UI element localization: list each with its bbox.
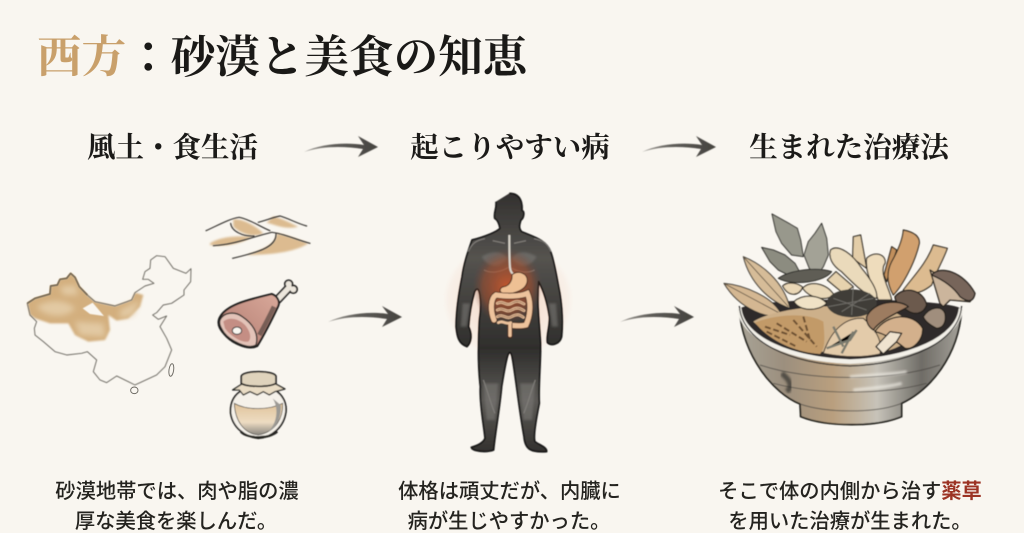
arrow: header two to three bbox=[642, 136, 716, 157]
text: robust body weak organs: 病が生じやすかった。 bbox=[408, 510, 610, 533]
arrow: header one to two bbox=[304, 136, 378, 157]
esophagus bbox=[509, 235, 516, 275]
dark herb tangle bbox=[827, 289, 877, 317]
icon: sand dunes bbox=[206, 216, 310, 258]
heading: common diseases: 起こりやすい病 bbox=[410, 132, 610, 164]
heading: resulting treatment: 生まれた治療法 bbox=[749, 132, 951, 164]
stomach bbox=[500, 273, 527, 294]
text: desert diet: 砂漠地帯では、肉や脂の濃 bbox=[55, 480, 299, 503]
illustration: human body with digestive organs bbox=[443, 193, 573, 452]
arrow: climate to disease bbox=[328, 306, 402, 327]
text: desert diet bbox=[55, 480, 299, 533]
belly redness bbox=[472, 248, 542, 325]
tan leaves bbox=[743, 257, 790, 308]
heading: climate and diet: 風土・食生活 bbox=[87, 132, 258, 164]
icon: ham leg bbox=[218, 279, 298, 347]
contents base bbox=[753, 306, 912, 354]
sliced root pile bbox=[755, 315, 824, 354]
bowl body bbox=[739, 310, 962, 425]
body silhouette bbox=[456, 193, 562, 452]
glow behind body bbox=[443, 242, 573, 358]
intestines bbox=[491, 293, 530, 336]
text: herbal treatment: そこで体の内側から治す薬草 bbox=[718, 480, 982, 503]
mushrooms bbox=[867, 270, 975, 354]
bowl rim bbox=[739, 308, 961, 362]
bowl interior bbox=[740, 300, 961, 359]
text: herbal treatment: を用いた治療が生まれた。 bbox=[728, 510, 972, 533]
muscle highlights bbox=[468, 239, 551, 413]
arrow: disease to treatment bbox=[620, 306, 694, 327]
bowl bands bbox=[760, 365, 940, 411]
dried roots bbox=[783, 230, 947, 309]
icon: jar bbox=[231, 372, 286, 438]
text: robust body weak organs bbox=[398, 480, 621, 533]
grey shading bbox=[461, 252, 558, 420]
icon: map of China bbox=[27, 256, 191, 394]
title: ：砂漠と美食の知恵 bbox=[126, 32, 531, 82]
pale herb and slices bbox=[823, 318, 881, 357]
text: desert diet: 厚な美食を楽しんだ。 bbox=[75, 510, 277, 533]
grey leaves bbox=[724, 214, 832, 316]
title: 西方 bbox=[37, 32, 126, 82]
text: herbal treatment bbox=[718, 480, 982, 533]
text: robust body weak organs: 体格は頑丈だが、内臓に bbox=[398, 480, 621, 503]
illustration: bowl of medicinal herbs bbox=[724, 214, 975, 425]
